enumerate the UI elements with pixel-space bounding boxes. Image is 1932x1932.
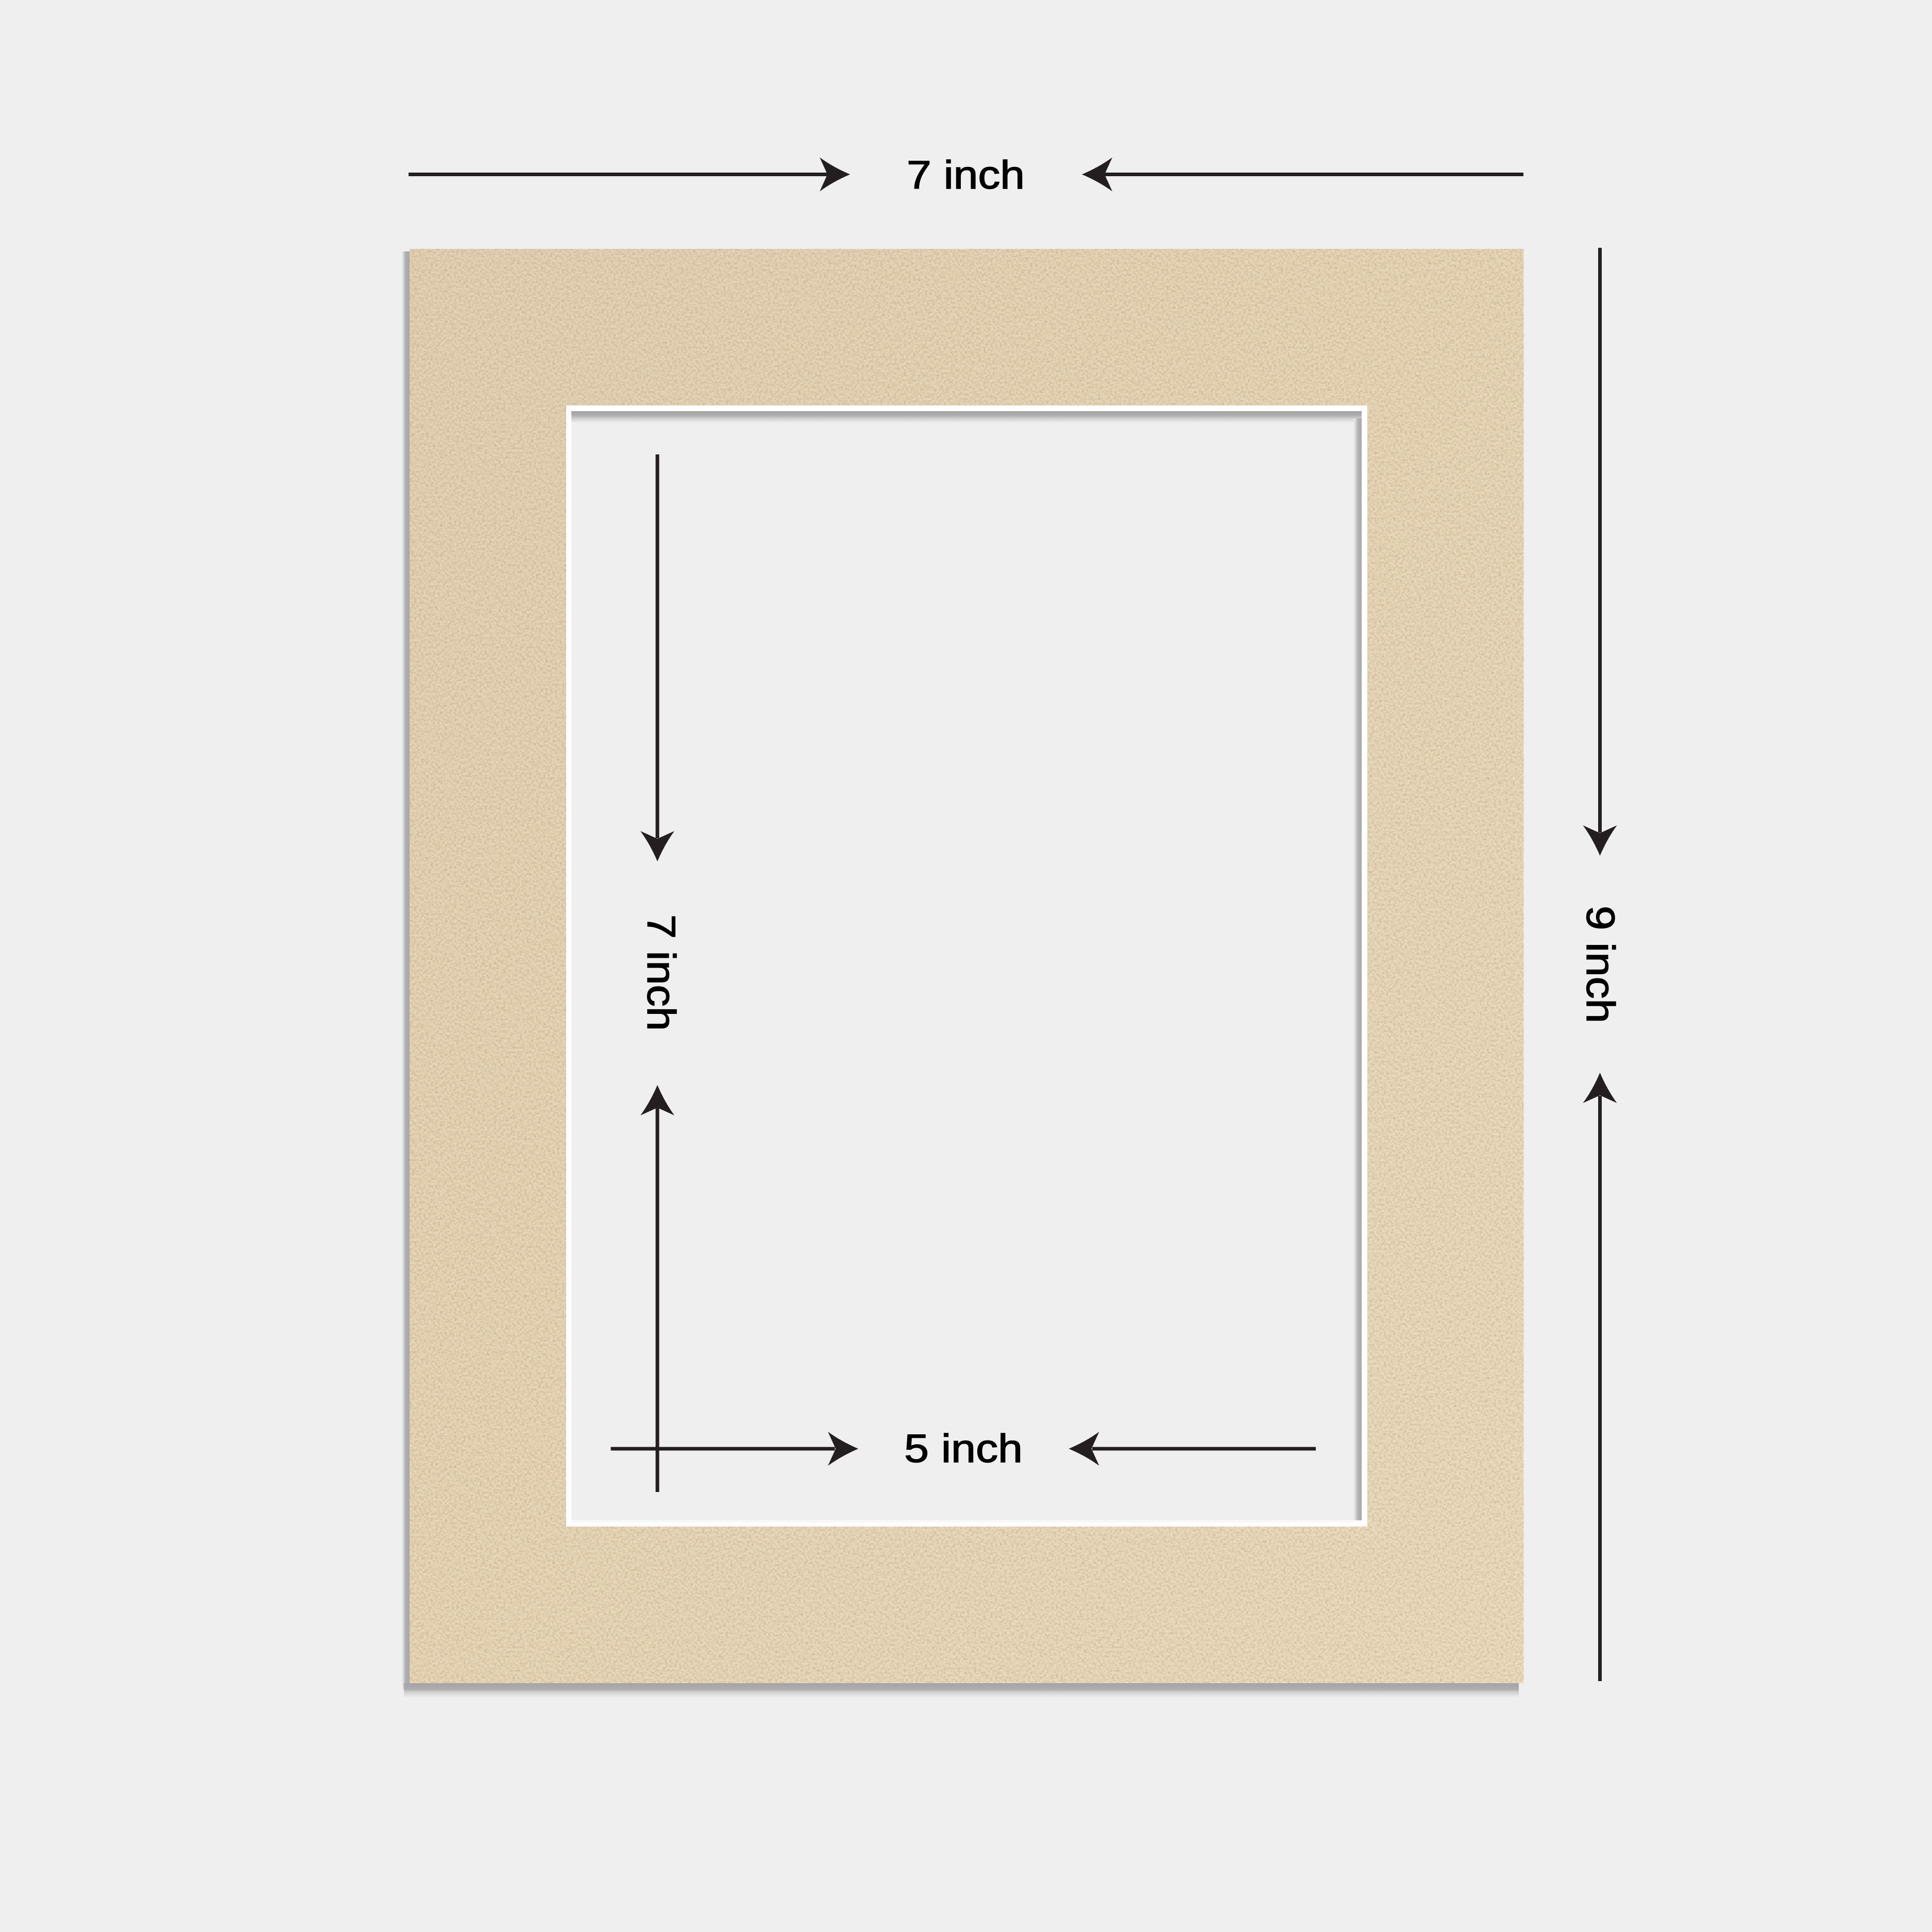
label: 5 inch inner width: 5 inch (904, 1427, 1023, 1471)
arrow: outer height, bottom pointing up (1583, 1073, 1617, 1681)
label: 7 inch width: 7 inch (907, 153, 1025, 197)
mat left shadow (402, 251, 410, 1689)
window top inner shadow (571, 411, 1362, 423)
window white bevel (566, 405, 1367, 1527)
arrow: inner width, left side pointing right (611, 1432, 858, 1466)
arrow: inner height, bottom pointing up (640, 1085, 674, 1492)
top width dimension: 7 inch (409, 153, 1523, 197)
inner height dimension: 7 inch (639, 454, 683, 1492)
mat board (410, 249, 1524, 1683)
window bottom bevel softening (571, 1520, 1354, 1522)
inner width dimension: 5 inch (611, 1427, 1316, 1471)
panel: beige photo mat with window (402, 249, 1524, 1698)
arrow: inner width, right side pointing left (1069, 1432, 1316, 1466)
arrow: inner height, top pointing down (640, 454, 674, 861)
label: 7 inch inner height: 7 inch (639, 914, 683, 1031)
mat bottom shadow (404, 1683, 1519, 1698)
label: 9 inch height: 9 inch (1578, 906, 1622, 1023)
arrow: top width, left side pointing right (409, 158, 850, 192)
arrow: top width, right side pointing left (1082, 158, 1523, 192)
arrow: outer height, top pointing down (1583, 248, 1617, 856)
outer height dimension: 9 inch (1578, 248, 1622, 1681)
window right inner shadow (1353, 418, 1362, 1520)
